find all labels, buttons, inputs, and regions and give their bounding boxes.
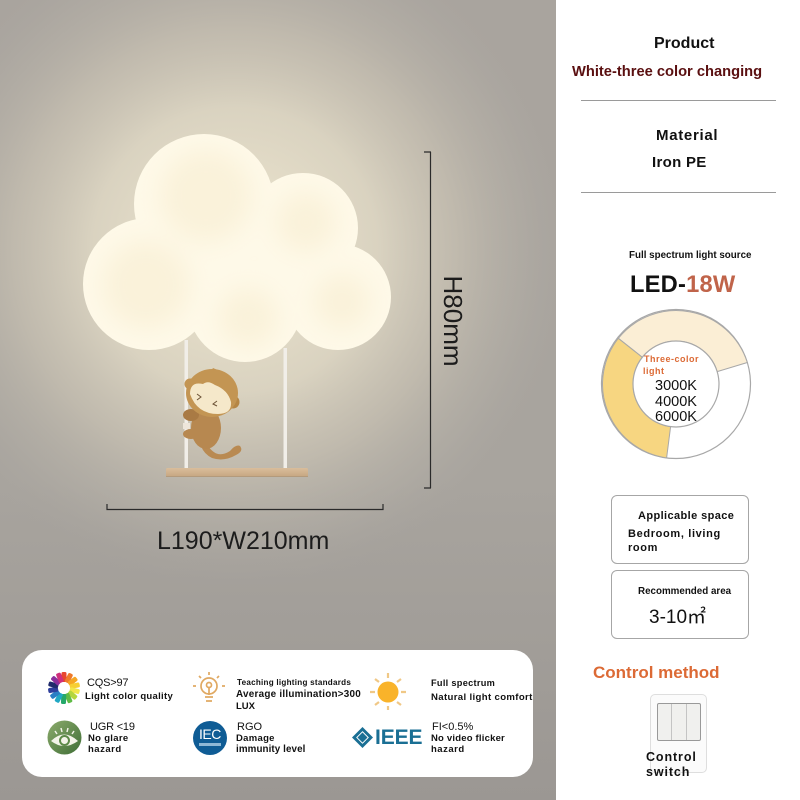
heading: material: Material [656, 127, 718, 144]
heading: product: Product [654, 35, 714, 52]
text: CQS: Light color quality [85, 691, 173, 702]
lamp cloud [83, 134, 391, 362]
text: control switch: switch [646, 765, 690, 779]
text: UGR: hazard [88, 744, 122, 755]
chart: color temperature donut [600, 308, 752, 460]
text: full spectrum: Natural light comfort [431, 692, 533, 703]
text: CQS: CQS>97 [87, 677, 128, 689]
panel: recommended area: Recommended area [638, 586, 731, 597]
dimension line: height [424, 152, 431, 488]
monkey figure [183, 368, 241, 459]
icon: IEC [193, 721, 227, 755]
panel: recommended area: 3-10㎡ [649, 607, 706, 628]
text: RGO [236, 721, 305, 755]
text: UGR: UGR <19 [90, 721, 135, 733]
icon: color wheel [48, 672, 80, 704]
text: product value: White-three color changing [572, 64, 762, 80]
heading: light source: Full spectrum light source [629, 250, 751, 261]
width label: L190*W210mm [157, 527, 329, 555]
text: teaching lighting: Teaching lighting standards [237, 678, 351, 687]
text: FI: FI<0.5% [432, 721, 473, 733]
text: color temperatures: 3000K [655, 378, 697, 394]
swing seat [166, 468, 308, 477]
panel: applicable space: Bedroom, living [628, 528, 721, 540]
text: FI [431, 721, 505, 755]
panel: feature badges [22, 650, 533, 777]
swing ropes [184, 340, 287, 468]
text: RGO: Damage [236, 733, 275, 744]
panel: applicable space: Applicable space [638, 510, 734, 522]
icon: wall switch [650, 694, 707, 773]
text: FI: hazard [431, 744, 465, 755]
text: material value: Iron PE [652, 154, 707, 171]
divider lines [581, 100, 776, 192]
dimension line: width [107, 504, 383, 510]
panel: applicable space [611, 495, 749, 564]
text: teaching lighting [236, 678, 361, 712]
text: color temperatures: 6000K [655, 409, 697, 425]
heading: control method: Control method [593, 663, 720, 682]
icon: IEEE: IEEE [375, 726, 422, 749]
text: RGO: RGO [237, 721, 262, 733]
icon: light bulb [193, 672, 225, 702]
chart: color temperature donut: light [643, 366, 664, 376]
text: full spectrum: Full spectrum [431, 678, 495, 688]
text: color temperatures: 4000K [655, 394, 697, 410]
text: control switch: Control [646, 750, 697, 764]
text: UGR: No glare [88, 733, 128, 744]
text: RGO: immunity level [236, 744, 305, 755]
icon: sun [370, 673, 406, 710]
text: UGR [88, 721, 135, 755]
text: three-color light: Three-color [644, 354, 699, 364]
height label: H80mm [438, 275, 468, 367]
text: teaching lighting: Average illumination>300 [236, 689, 361, 700]
text: color temperatures [655, 378, 697, 425]
panel: recommended area [611, 570, 749, 639]
segment: yellow [603, 338, 671, 458]
icon: eye [48, 720, 82, 754]
icon: IEC: IEC [199, 726, 221, 742]
heading: LED power: LED-18W [630, 272, 735, 298]
text: control switch [646, 750, 697, 779]
text: full spectrum [431, 678, 533, 703]
segment: warm [618, 311, 747, 372]
text: CQS [85, 677, 173, 702]
text: teaching lighting: LUX [236, 701, 255, 712]
icon: IEEE [352, 726, 422, 749]
panel: applicable space: room [628, 542, 658, 554]
text: FI: No video flicker [431, 733, 505, 744]
